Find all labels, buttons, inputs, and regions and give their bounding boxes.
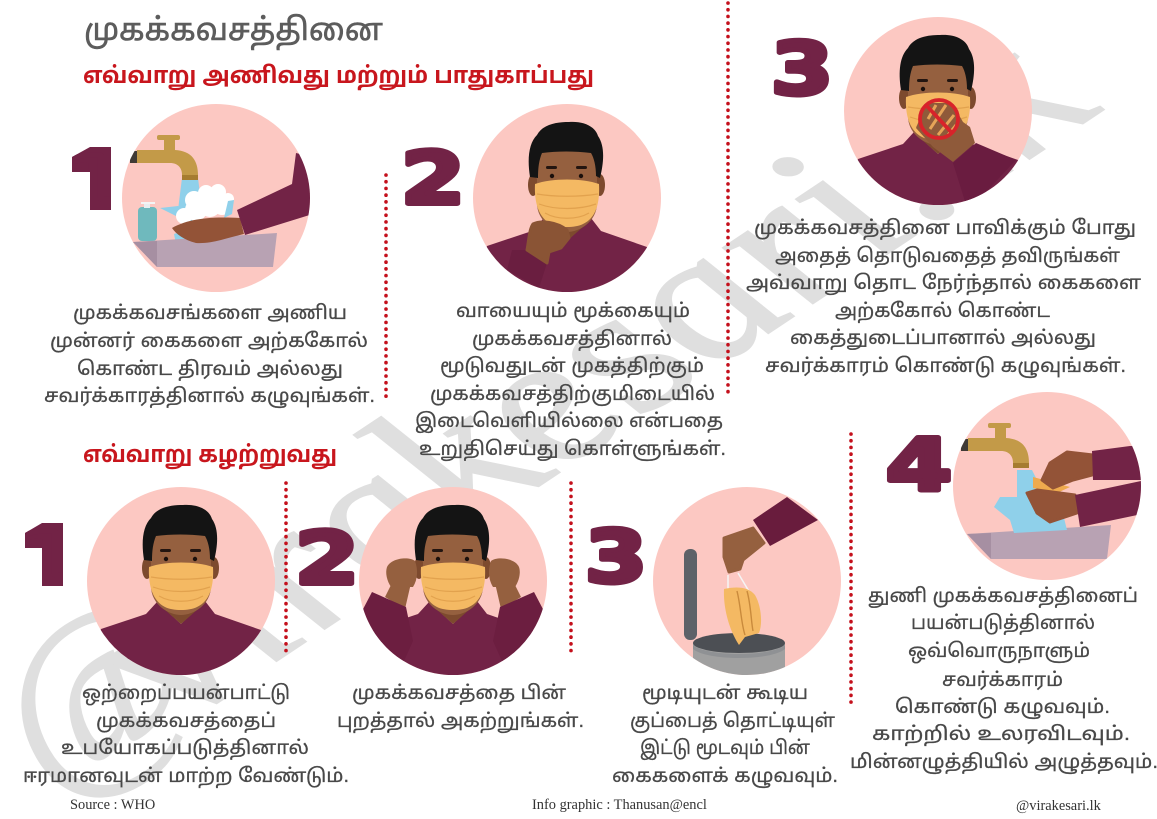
text: wear step 1 <box>44 302 375 409</box>
text: wear step 2: முகக்கவசத்திற்குமிடையில் <box>430 383 715 407</box>
title: முகக்கவசத்தினை <box>84 12 383 50</box>
number: wear step 1: 1 <box>61 141 121 225</box>
divider lines <box>286 3 851 706</box>
footer: credit: Info graphic : Thanusan@encl <box>532 797 707 813</box>
text: wear step 3: அதைத் தொடுவதைத் தவிருங்கள் <box>775 245 1120 269</box>
icon: man removing mask by ear loops <box>353 487 553 681</box>
text: wear step 3 <box>746 217 1141 379</box>
number: remove step 2: 2 <box>295 516 359 600</box>
text: remove step 3: குப்பைத் தொட்டியுள் <box>630 710 835 734</box>
watermark: virakesari.lk <box>4 4 1154 747</box>
text: wear step 2: முகக்கவசத்தினால் <box>472 328 672 351</box>
text: remove step 3: இட்டு மூடவும் பின் <box>640 737 811 761</box>
text: remove step 3 <box>612 683 838 789</box>
text: remove step 4: சவர்க்காரம் <box>942 670 1063 691</box>
icon: man wearing mask <box>81 487 281 681</box>
text: remove step 1: உபயோகப்படுத்தினால் <box>61 737 309 760</box>
number: remove step 1: 1 <box>15 517 75 601</box>
text: remove step 3: மூடியுடன் கூடிய <box>642 683 808 705</box>
number: wear step 2: 2 <box>401 136 465 220</box>
text: remove step 1: முகக்கவசத்தைப் <box>96 711 276 733</box>
text: remove step 4: ஒவ்வொருநாளும் <box>908 640 1090 664</box>
text: remove step 4 <box>850 585 1157 775</box>
icon: man adjusting mask <box>467 104 667 298</box>
text: wear step 3: சவர்க்காரம் கொண்டு கழுவுங்கள். <box>765 355 1126 379</box>
text: wear step 3: அற்ககோல் கொண்ட <box>835 300 1050 323</box>
text: wear step 1: சவர்க்காரத்தினால் கழுவுங்கள். <box>44 385 375 409</box>
text: remove step 2: புறத்தால் அகற்றுங்கள். <box>337 711 584 734</box>
text: remove step 4: கொண்டு கழுவவும். <box>895 696 1110 720</box>
text: remove step 2 <box>337 682 584 734</box>
icon: washing hands with soap <box>122 104 316 292</box>
heading: how to remove: எவ்வாறு கழற்றுவது <box>83 441 337 470</box>
text: remove step 1: ஒற்றைப்பயன்பாட்டு <box>82 682 290 706</box>
text: wear step 1: முகக்கவசங்களை அணிய <box>73 302 347 325</box>
text: wear step 1: முன்னர் கைகளை அற்ககோல் <box>50 330 368 353</box>
number: remove step 4: 4 <box>886 423 952 507</box>
icon: man touching mask, prohibited <box>838 17 1038 211</box>
text: wear step 1: கொண்ட திரவம் அல்லது <box>77 358 343 382</box>
footer: site: @virakesari.lk <box>1016 798 1102 814</box>
text: remove step 3: கைகளைக் கழுவவும். <box>612 766 838 789</box>
text: remove step 1 <box>23 682 349 788</box>
number: wear step 1 <box>72 147 111 210</box>
text: remove step 4: பயன்படுத்தினால் <box>911 612 1095 635</box>
text: wear step 3: கைத்துடைப்பானால் அல்லது <box>790 328 1096 351</box>
text: remove step 1: ஈரமானவுடன் மாற்ற வேண்டும். <box>23 765 349 788</box>
text: wear step 2 <box>415 301 726 462</box>
text: wear step 3: அவ்வாறு தொட நேர்ந்தால் கைகளை <box>746 272 1141 296</box>
text: remove step 2: முகக்கவசத்தை பின் <box>352 682 567 705</box>
text: remove step 4: துணி முகக்கவசத்தினைப் <box>868 585 1138 609</box>
heading: how to wear: எவ்வாறு அணிவது மற்றும் பாதுகாப்பது <box>83 62 594 91</box>
text: wear step 2: வாயையும் மூக்கையும் <box>456 301 690 323</box>
footer: source: Source : WHO <box>70 797 155 813</box>
number: wear step 3: 3 <box>771 27 833 111</box>
icon: dropping mask into bin <box>653 487 841 681</box>
text: wear step 2: மூடுவதுடன் முகத்திற்கும் <box>440 355 704 379</box>
text: remove step 4: காற்றில் உலரவிடவும். <box>872 723 1130 746</box>
text: wear step 2: இடைவெளியில்லை என்பதை <box>415 410 723 434</box>
icon: washing cloth mask under tap <box>953 392 1147 580</box>
text: remove step 4: மின்னழுத்தியில் அழுத்தவும். <box>850 751 1157 775</box>
text: wear step 3: முகக்கவசத்தினை பாவிக்கும் போது <box>754 217 1136 241</box>
text: wear step 2: உறுதிசெய்து கொள்ளுங்கள். <box>419 438 726 462</box>
number: remove step 1 <box>25 523 63 586</box>
number: remove step 3: 3 <box>585 515 647 599</box>
